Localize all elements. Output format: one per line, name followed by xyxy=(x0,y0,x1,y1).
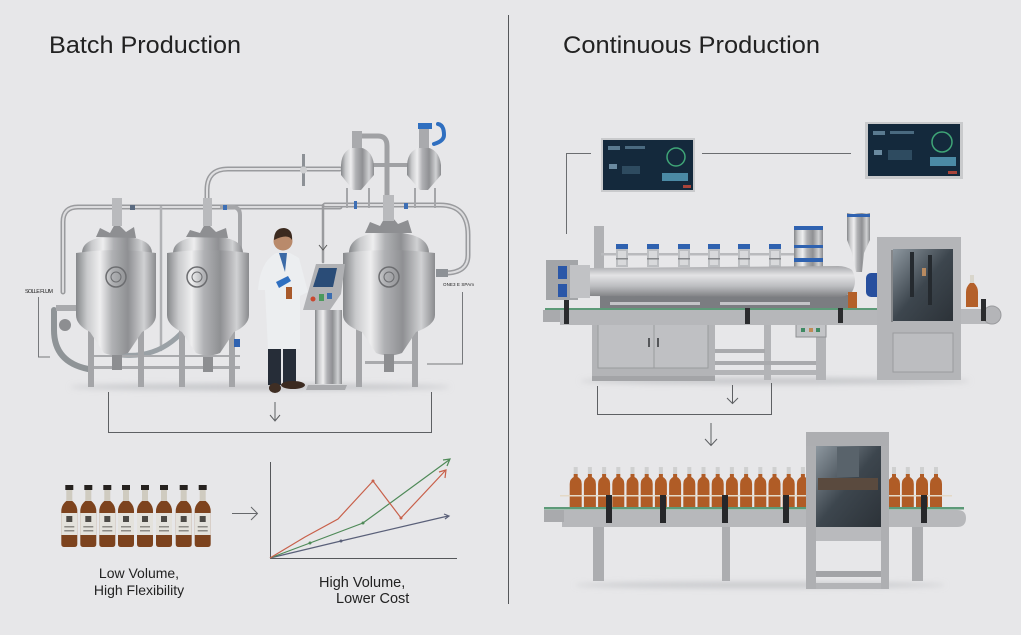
frame rails: batch xyxy=(90,355,415,369)
bracket and arrow below tanks xyxy=(108,392,432,432)
heading: batch production: Batch Production xyxy=(49,32,241,59)
bottling conveyor xyxy=(544,432,966,589)
hopper 1 xyxy=(341,131,374,208)
callout bracket: right label: ONE3 E SPAm xyxy=(443,282,474,287)
left motor xyxy=(546,260,590,300)
monitor 2 xyxy=(865,122,963,179)
icon: valve instrument on top pipe xyxy=(300,154,307,186)
arrow: bottles to chart xyxy=(232,507,258,520)
cabinet xyxy=(592,310,715,381)
panel: batch production xyxy=(25,32,474,607)
conveyor xyxy=(543,298,886,325)
filling station xyxy=(806,432,889,589)
conveyor belt and frame xyxy=(544,507,966,527)
divider between panels xyxy=(508,15,510,604)
switch box xyxy=(796,312,826,337)
support post xyxy=(594,226,604,268)
arrow to filling line xyxy=(705,423,717,446)
rail xyxy=(601,253,796,256)
clamps xyxy=(606,495,927,523)
jars xyxy=(616,244,781,267)
heated tube xyxy=(589,266,855,297)
label: high volume: High Volume, xyxy=(319,575,405,591)
connector lines to monitors xyxy=(566,154,851,234)
valves: batch xyxy=(56,201,448,331)
tall vessel cluster xyxy=(794,226,823,268)
amber bottle xyxy=(848,292,857,308)
heading: continuous production: Continuous Production xyxy=(563,32,820,59)
callout bracket: left label: SOLLE FLUM xyxy=(25,289,53,295)
guide rail xyxy=(560,495,952,496)
floor shadow: conveyor xyxy=(575,582,945,588)
blue flange xyxy=(866,273,885,297)
out-feed conveyor xyxy=(961,299,1001,324)
filling cabinet xyxy=(877,237,961,380)
line chart xyxy=(270,459,457,558)
tank 2 xyxy=(167,198,249,387)
label: low volume: Low Volume, xyxy=(99,565,179,581)
callout bracket: left label xyxy=(25,289,53,357)
bottles: low volume batch xyxy=(61,485,211,547)
operator in lab coat xyxy=(258,228,308,393)
pipework: batch xyxy=(54,124,468,369)
label: high volume: Lower Cost xyxy=(336,591,409,607)
floor shadow: batch xyxy=(70,384,450,390)
control panel xyxy=(303,264,347,390)
bracket and arrow below machine xyxy=(598,383,772,414)
hopper 2 xyxy=(407,123,441,208)
hopper xyxy=(847,213,870,272)
monitor 1 xyxy=(601,138,695,192)
callout bracket: right label xyxy=(427,282,474,364)
arrow: pipe into panel xyxy=(319,245,327,250)
finished bottle xyxy=(966,275,978,307)
dark drive area xyxy=(600,295,850,308)
conveyor legs xyxy=(593,526,923,581)
continuous machine xyxy=(543,213,1001,384)
tank 1 xyxy=(76,198,156,387)
tank 3 xyxy=(343,195,435,387)
floor shadow: machine xyxy=(580,378,970,384)
label: low volume: High Flexibility xyxy=(94,582,184,598)
amber bottle row xyxy=(570,467,942,507)
middle frame xyxy=(715,315,826,380)
panel: continuous production xyxy=(543,32,1001,589)
